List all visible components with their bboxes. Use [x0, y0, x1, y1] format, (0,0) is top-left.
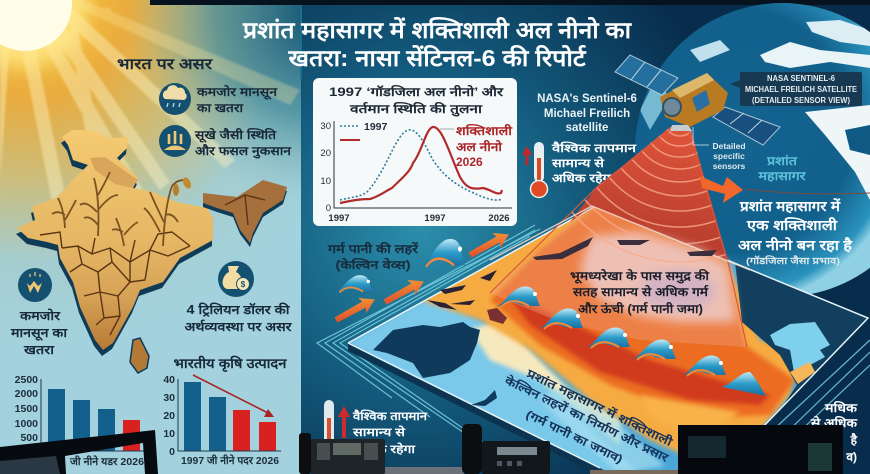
panel: 1997 vs 2026 line chart: 20 — [320, 148, 331, 159]
text: Pacific Ocean label: प्रशांत — [766, 154, 798, 168]
heading: India impact: भारत पर असर — [117, 56, 213, 73]
callout: satellite sensor view: (DETAILED SENSOR VIEW) — [752, 96, 850, 105]
line 2026 — [340, 127, 502, 203]
icon: money bag: $ — [241, 280, 246, 289]
bar chart: left: जी नीने यडर 2026 — [69, 455, 144, 468]
map shadow — [16, 136, 212, 356]
chart title: 1997 ‘गॉडजिला अल नीनो’ और — [329, 85, 504, 99]
text: strong El Nino forming: एक शक्तिशाली — [746, 217, 839, 233]
icon: monitor bottom right — [678, 425, 843, 474]
text: 4 trillion economy: अर्थव्यवस्था पर असर — [184, 319, 293, 334]
line: equator — [745, 189, 870, 194]
panel: 1997 vs 2026 line chart — [313, 78, 517, 226]
callout: detailed specific sensors: Detailed — [712, 141, 746, 151]
bar chart: left: 500 — [20, 432, 38, 444]
text: warm water waves: (केल्विन वेव्स) — [336, 258, 410, 272]
text: partial right caption: से अधिक — [810, 416, 858, 430]
map east shadow — [203, 184, 287, 247]
callout: detailed specific sensors: specific — [713, 151, 745, 161]
right solar panel — [713, 107, 780, 145]
Indonesia islands — [427, 270, 497, 310]
waves on map — [495, 287, 766, 396]
arrow: orange 2 — [381, 273, 428, 309]
callout: detailed specific sensors: sensors — [713, 161, 746, 171]
text: partial right caption: मधिक — [824, 401, 858, 415]
label powerful El Nino 2026: शक्तिशाली — [456, 124, 513, 138]
arrow: declining trend — [193, 375, 274, 417]
text: global temperature bottom: वैश्विक तापमान — [352, 409, 428, 423]
icon: thermometer centre — [522, 142, 548, 198]
bar chart: agriculture: 0 — [169, 446, 175, 458]
text: sea surface warming — [570, 269, 710, 316]
text: Kelvin wave caption on map: केल्विन लहरों का निर्माण और प्रसार — [502, 373, 672, 465]
text: Pacific Ocean label: महासागर — [757, 169, 807, 183]
text: NASA Sentinel-6 label — [537, 93, 637, 134]
panel: 1997 vs 2026 line chart: 1997 — [424, 213, 446, 224]
map: drought-cracked India — [16, 130, 287, 373]
plate edge highlight — [348, 206, 868, 468]
text: weak monsoon — [196, 85, 279, 115]
text: global temperature bottom — [352, 409, 428, 456]
icon: broken monitor bottom left — [0, 430, 158, 474]
bar chart: agriculture — [163, 374, 281, 467]
New Zealand — [471, 390, 497, 406]
arrow: orange 3 — [466, 226, 513, 262]
text: warm water waves: गर्म पानी की लहरें — [327, 242, 419, 256]
leader — [440, 128, 454, 130]
text: NASA Sentinel-6 label: Michael Freilich — [544, 108, 630, 120]
bar chart: agriculture: 30 — [163, 392, 175, 404]
icon: money bag — [218, 261, 254, 297]
title: प्रशांत महासागर में शक्तिशाली अल नीनो का — [242, 16, 632, 43]
bottom strip right — [590, 470, 678, 474]
text: NASA Sentinel-6 label: satellite — [566, 122, 608, 134]
chart title: वर्तमान स्थिति की तुलना — [349, 102, 483, 117]
icon: weak monsoon left — [18, 268, 52, 302]
lines: flow chevrons around map — [317, 225, 870, 447]
panel: 1997 vs 2026 line chart: 1997 — [364, 121, 388, 133]
text: weak monsoon: का खतरा — [196, 101, 244, 115]
legend — [340, 125, 360, 127]
bar chart: left: 1500 — [15, 403, 38, 415]
wheat heads — [181, 176, 193, 190]
cracks — [40, 195, 265, 335]
text: global temperature centre — [551, 141, 637, 185]
bar chart: left — [15, 374, 145, 468]
text: drought and crop loss — [194, 128, 293, 159]
text: Kelvin wave caption on map: प्रशांत महासागर में शक्तिशाली — [524, 366, 676, 449]
map main land — [17, 130, 213, 350]
beam above plate — [570, 127, 728, 261]
arrow: orange beam arrow — [700, 176, 743, 203]
panel: divider right background — [300, 5, 302, 79]
lavender centre — [640, 270, 716, 310]
bar chart: agriculture: 20 — [163, 410, 175, 422]
panel: background left — [0, 0, 301, 474]
text: partial right caption: है — [850, 433, 858, 447]
text: strong El Nino forming — [738, 198, 853, 267]
text: Kelvin wave caption on map: (गर्म पानी का जमाव) — [524, 407, 625, 466]
label powerful El Nino 2026: अल नीनो — [456, 140, 503, 154]
satellite beam — [490, 127, 750, 347]
bar chart: agriculture: 40 — [163, 374, 175, 386]
callout: satellite sensor view: NASA SENTINEL-6 — [767, 74, 836, 83]
bar chart: agriculture: 10 — [163, 428, 175, 440]
text: sea surface warming: भूमध्यरेखा के पास समुद्र की — [570, 269, 710, 284]
text: warm water waves — [327, 242, 419, 272]
panel: 1997 vs 2026 line chart: 0 — [326, 203, 331, 214]
panel: 1997 vs 2026 line chart: 2026 — [488, 213, 510, 224]
Himalaya ridge — [90, 157, 138, 188]
map east region — [203, 180, 287, 243]
text: weak monsoon risk: खतरा — [23, 343, 55, 357]
text: weak monsoon risk: कमजोर — [19, 308, 61, 323]
callout: detailed specific sensors — [693, 127, 746, 171]
text: global temperature bottom: सामान्य से — [352, 425, 407, 439]
beam footprint on plate — [490, 206, 747, 347]
text: weak monsoon risk: मानसून का — [10, 326, 68, 341]
satellite — [615, 55, 780, 145]
bar chart: left: 1000 — [15, 418, 38, 430]
text: drought and crop loss: और फसल नुकसान — [195, 144, 293, 159]
line 1997 — [340, 130, 502, 200]
dried plants — [52, 172, 188, 246]
bar chart: left: 2000 — [15, 388, 38, 400]
title: खतरा: नासा सेंटिनल-6 की रिपोर्ट — [287, 44, 587, 71]
Australia — [373, 322, 480, 378]
text: global temperature centre: सामान्य से — [551, 156, 606, 170]
Papua New Guinea — [487, 308, 507, 324]
map: Pacific sea-temperature plate — [340, 200, 870, 474]
text: weak monsoon risk — [10, 308, 68, 357]
text: strong El Nino forming: (गॉडजिला जैसा प्रभाव) — [746, 255, 840, 267]
title — [242, 16, 632, 71]
text: global temperature centre: वैश्विक तापमान — [551, 141, 637, 155]
icon: weak monsoon cloud — [159, 83, 191, 115]
Sri Lanka — [130, 338, 149, 373]
beam arcs — [572, 129, 726, 263]
bar chart: agriculture: 1997 जी नीने पदर 2026 — [181, 454, 279, 467]
icon: desk phone left — [299, 433, 385, 474]
callout: satellite sensor view: MICHAEL FREILICH SATELLITE — [745, 85, 858, 94]
text: NASA Sentinel-6 label: NASA's Sentinel-6 — [537, 93, 637, 105]
text: sea surface warming: और ऊंची (गर्म पानी जमा) — [578, 302, 703, 316]
panel: 1997 vs 2026 line chart: 10 — [320, 176, 331, 187]
icon: globe — [635, 3, 870, 297]
plate thickness — [348, 343, 612, 474]
panel: 1997 vs 2026 line chart: 30 — [320, 121, 331, 132]
arrow: orange 1 — [332, 291, 379, 327]
text: partial right caption: व) — [845, 450, 857, 464]
top dark strip — [150, 0, 870, 5]
chart title — [329, 85, 504, 117]
beam edges and plate line — [490, 128, 747, 347]
icon: sun with rays — [0, 0, 300, 222]
bottom strip — [384, 467, 464, 474]
text: strong El Nino forming: प्रशांत महासागर में — [739, 198, 841, 214]
bar chart: left: 2500 — [15, 374, 38, 386]
icon: desk phone right — [462, 424, 550, 474]
text: 4 trillion economy — [184, 302, 293, 334]
callout: satellite sensor view — [730, 72, 862, 106]
icon: small wave top — [420, 239, 465, 266]
text: sea surface warming: सतह सामान्य से अधिक गर्म — [572, 285, 709, 299]
text: 4 trillion economy: 4 ट्रिलियन डॉलर की — [186, 302, 290, 317]
satellite body — [660, 73, 728, 127]
icon: small wave left — [334, 275, 373, 292]
icon: crop loss — [159, 125, 191, 157]
text: weak monsoon: कमजोर मानसून — [196, 85, 279, 100]
label powerful El Nino 2026: 2026 — [456, 155, 483, 169]
text: global temperature centre: अधिक रहेगा — [552, 171, 615, 185]
icon: thermometer bottom — [324, 400, 350, 444]
text: partial right caption — [810, 401, 858, 464]
text: Kelvin wave caption on map — [502, 366, 676, 466]
dark islands through beam — [533, 237, 717, 260]
heading: Indian agriculture production: भारतीय कृषि उत्पादन — [174, 355, 287, 372]
panel: 1997 vs 2026 line chart: 1997 — [328, 213, 350, 224]
text: strong El Nino forming: अल नीनो बन रहा है — [738, 237, 853, 253]
left solar panel — [615, 55, 678, 95]
text: Pacific Ocean label — [757, 154, 807, 183]
text: global temperature bottom: अधिक रहेगा — [353, 442, 416, 456]
pale warm water patch — [580, 232, 736, 322]
text: drought and crop loss: सूखे जैसी स्थिति — [194, 128, 277, 143]
label powerful El Nino 2026 — [456, 124, 513, 169]
